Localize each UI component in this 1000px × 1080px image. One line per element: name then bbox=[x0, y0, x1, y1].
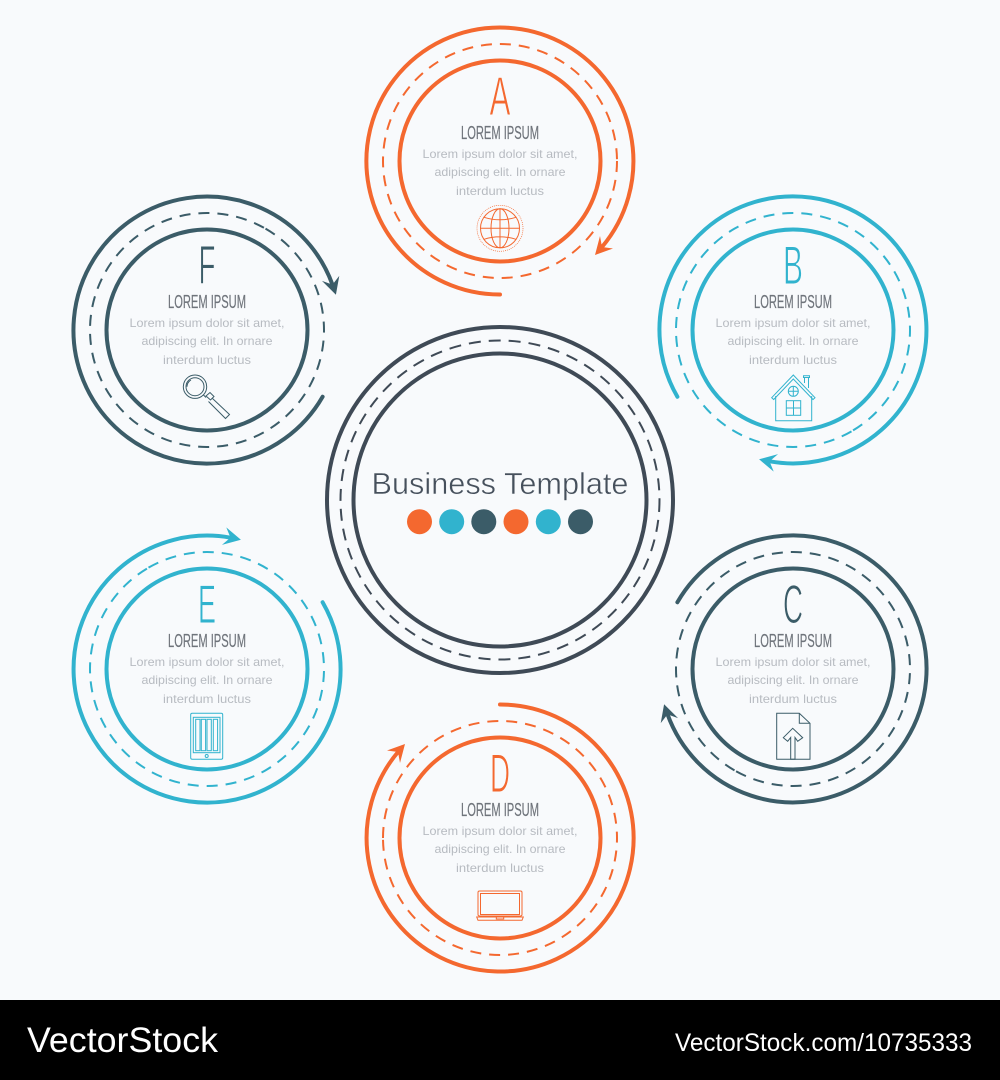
icon: house bbox=[772, 375, 815, 421]
body F: adipiscing elit. In ornare bbox=[142, 334, 273, 348]
panel: C bbox=[611, 487, 975, 851]
panel: center circle bbox=[327, 327, 673, 673]
icon: tablet bbox=[191, 713, 223, 759]
body F bbox=[130, 316, 284, 367]
body B: interdum luctus bbox=[749, 353, 837, 367]
body D bbox=[422, 824, 578, 875]
letter A: A bbox=[490, 66, 511, 127]
center rings bbox=[327, 327, 673, 673]
panel: A bbox=[366, 28, 633, 295]
body B bbox=[716, 316, 870, 367]
body C: adipiscing elit. In ornare bbox=[728, 673, 859, 687]
body C: interdum luctus bbox=[749, 692, 837, 706]
body E: adipiscing elit. In ornare bbox=[142, 673, 273, 687]
icon: magnifier bbox=[183, 375, 230, 418]
body A bbox=[422, 147, 578, 198]
panel: E bbox=[25, 487, 389, 851]
panel: F bbox=[25, 148, 389, 512]
heading C: LOREM IPSUM bbox=[754, 631, 832, 651]
icon: document upload bbox=[777, 713, 810, 759]
body D: Lorem ipsum dolor sit amet, bbox=[422, 824, 578, 838]
icon: laptop bbox=[477, 891, 523, 920]
arrow ring F bbox=[25, 148, 389, 512]
arrow ring C bbox=[611, 487, 975, 851]
body F: interdum luctus bbox=[163, 353, 251, 367]
letter F: F bbox=[198, 235, 216, 296]
heading F: LOREM IPSUM bbox=[168, 292, 246, 312]
color dots bbox=[407, 509, 593, 534]
body E bbox=[130, 655, 284, 706]
body E: Lorem ipsum dolor sit amet, bbox=[130, 655, 284, 669]
body D: interdum luctus bbox=[456, 861, 544, 875]
body B: adipiscing elit. In ornare bbox=[728, 334, 859, 348]
body C: Lorem ipsum dolor sit amet, bbox=[716, 655, 870, 669]
arrow ring D bbox=[367, 704, 634, 971]
letter C: C bbox=[783, 574, 803, 635]
icon: globe bbox=[477, 205, 523, 251]
body B: Lorem ipsum dolor sit amet, bbox=[716, 316, 870, 330]
body A: adipiscing elit. In ornare bbox=[434, 165, 566, 179]
body F: Lorem ipsum dolor sit amet, bbox=[130, 316, 284, 330]
body A: interdum luctus bbox=[456, 184, 544, 198]
heading E: LOREM IPSUM bbox=[168, 631, 246, 651]
panel: E: E bbox=[198, 574, 216, 635]
panel: D bbox=[367, 704, 634, 971]
banner bbox=[0, 1000, 1000, 1080]
arrow ring E bbox=[25, 487, 389, 851]
body A: Lorem ipsum dolor sit amet, bbox=[422, 147, 578, 161]
arrow ring A bbox=[366, 28, 633, 295]
banner logo: VectorStock bbox=[27, 1021, 219, 1060]
body E: interdum luctus bbox=[163, 692, 251, 706]
letter B: B bbox=[783, 235, 803, 296]
panel: B bbox=[611, 148, 975, 512]
title: Business Template bbox=[372, 466, 628, 501]
body C bbox=[716, 655, 870, 706]
heading B: LOREM IPSUM bbox=[754, 292, 832, 312]
heading A: LOREM IPSUM bbox=[461, 123, 539, 143]
letter D: D bbox=[490, 743, 510, 804]
banner url: VectorStock.com/10735333 bbox=[675, 1029, 972, 1057]
arrow ring B bbox=[611, 148, 975, 512]
heading D: LOREM IPSUM bbox=[461, 800, 539, 820]
body D: adipiscing elit. In ornare bbox=[434, 842, 566, 856]
